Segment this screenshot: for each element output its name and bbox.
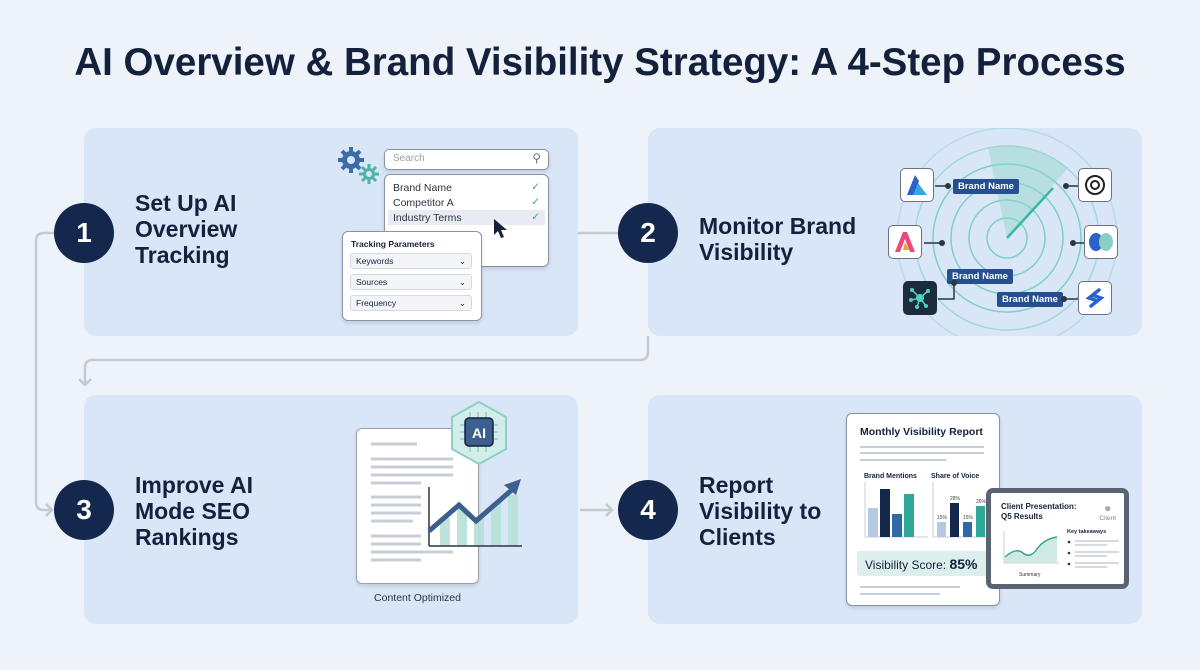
tracking parameters card: Sources bbox=[356, 277, 387, 287]
list of terms: ✓ bbox=[531, 211, 540, 223]
tracking parameters card: Tracking Parameters bbox=[351, 239, 435, 249]
icon: cursor bbox=[494, 219, 507, 238]
brand labels bbox=[953, 179, 1019, 194]
step 4 heading: Clients bbox=[699, 524, 776, 550]
visibility score bbox=[857, 551, 992, 576]
step 1 heading: Tracking bbox=[135, 242, 230, 268]
bar charts: 26% bbox=[976, 499, 987, 505]
client presentation tablet: ● bbox=[1104, 501, 1111, 515]
step number 2: 2 bbox=[640, 217, 656, 248]
icon: brain bbox=[1084, 225, 1118, 259]
client presentation tablet: Key takeaways bbox=[1067, 529, 1106, 535]
search bar bbox=[384, 149, 549, 170]
step number 2 bbox=[618, 203, 678, 263]
bar charts: 28% bbox=[950, 496, 961, 502]
list of terms: Industry Terms bbox=[393, 212, 462, 224]
client presentation tablet: Client Presentation: bbox=[1001, 502, 1077, 511]
tracking parameters card: ⌄ bbox=[459, 298, 466, 308]
step 3 heading bbox=[135, 472, 253, 550]
search bar: ⚲ bbox=[532, 151, 541, 165]
title: AI Overview & Brand Visibility Strategy: A 4-Step Process bbox=[74, 41, 1126, 84]
bar charts: 15% bbox=[963, 515, 974, 521]
panel: step 2: Brand Name bbox=[952, 271, 1008, 282]
caption: Content Optimized bbox=[374, 592, 461, 604]
icon: s logo bbox=[1078, 281, 1112, 315]
step number 3 bbox=[54, 480, 114, 540]
list of terms: Competitor A bbox=[393, 197, 454, 209]
list of terms bbox=[384, 174, 549, 267]
client presentation tablet: Q5 Results bbox=[1001, 512, 1043, 521]
radar chart bbox=[897, 128, 1118, 336]
bar charts bbox=[864, 482, 987, 538]
step 4 heading: Visibility to bbox=[699, 498, 821, 524]
tracking parameters card: ⌄ bbox=[459, 256, 466, 266]
step number 4 bbox=[618, 480, 678, 540]
icon: openai bbox=[1078, 168, 1112, 202]
bar charts: 15% bbox=[937, 515, 948, 521]
brand labels: Brand Name bbox=[958, 181, 1014, 192]
panel: step 2 bbox=[648, 128, 1142, 336]
step number 4: 4 bbox=[640, 494, 656, 525]
step 2 heading: Visibility bbox=[699, 239, 793, 265]
visibility score: Visibility Score: 85% bbox=[865, 556, 978, 572]
monthly report card: Monthly Visibility Report bbox=[860, 426, 983, 438]
search bar: Search bbox=[393, 153, 425, 164]
step 2 heading: Monitor Brand bbox=[699, 213, 856, 239]
connector lines bbox=[924, 183, 1084, 302]
icon: AI chip bbox=[451, 401, 507, 465]
tracking parameters card: ⌄ bbox=[459, 277, 466, 287]
icon: network bbox=[903, 281, 937, 315]
step number 3: 3 bbox=[76, 494, 92, 525]
panel: step 2: Brand Name bbox=[1002, 294, 1058, 305]
step 3 heading: Rankings bbox=[135, 524, 239, 550]
step 4 heading bbox=[699, 472, 821, 550]
step 1 heading: Set Up AI bbox=[135, 190, 236, 216]
step 4 heading: Report bbox=[699, 472, 773, 498]
step 1 heading bbox=[135, 190, 238, 268]
client presentation tablet bbox=[986, 488, 1129, 589]
step number 1 bbox=[54, 203, 114, 263]
panel: step 3 bbox=[84, 395, 578, 624]
list of terms: Brand Name bbox=[393, 182, 452, 194]
icon: gears bbox=[338, 147, 379, 184]
document with growth chart bbox=[356, 428, 479, 584]
monthly report card: Share of Voice bbox=[931, 473, 979, 480]
tracking parameters card: Frequency bbox=[356, 298, 396, 308]
tracking parameters card bbox=[342, 231, 482, 321]
icon: azure bbox=[900, 168, 934, 202]
client presentation tablet: Client bbox=[1099, 515, 1116, 522]
list of terms: ✓ bbox=[531, 181, 540, 193]
step number 1: 1 bbox=[76, 217, 92, 248]
step 2 heading bbox=[699, 213, 856, 265]
growth chart bbox=[427, 479, 522, 547]
monthly report card bbox=[846, 413, 1000, 606]
panel: step 4 bbox=[648, 395, 1142, 624]
step 3 heading: Mode SEO bbox=[135, 498, 250, 524]
step 1 heading: Overview bbox=[135, 216, 237, 242]
panel: step 1 bbox=[84, 128, 578, 336]
icon: adobe bbox=[888, 225, 922, 259]
list of terms: ✓ bbox=[531, 196, 540, 208]
step 3 heading: Improve AI bbox=[135, 472, 253, 498]
monthly report card: Brand Mentions bbox=[864, 473, 917, 480]
tracking parameters card: Keywords bbox=[356, 256, 393, 266]
icon: AI chip: AI bbox=[472, 425, 486, 441]
client presentation tablet: Summary bbox=[1019, 572, 1040, 578]
